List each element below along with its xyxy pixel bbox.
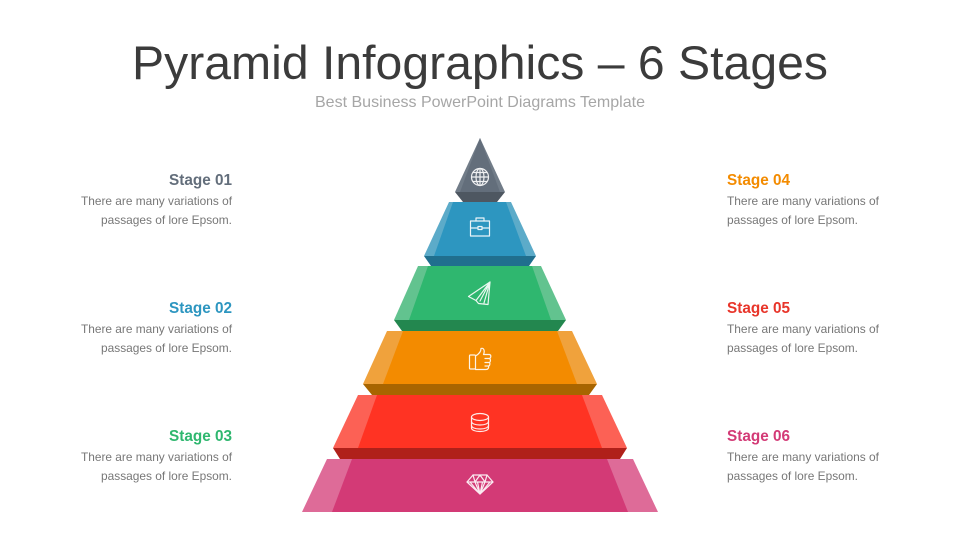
pyramid tier 5: red — [333, 395, 627, 459]
text block: stage 06: There are many variations of — [727, 450, 880, 464]
pyramid tier 4: orange — [363, 331, 597, 395]
text block: stage 04: There are many variations of — [727, 194, 880, 208]
text block: stage 03 — [81, 428, 233, 483]
pyramid tier 3: green — [394, 266, 566, 331]
text block: stage 02 — [81, 300, 233, 355]
text block: stage 05: passages of lore Epsom. — [727, 341, 858, 355]
text block: stage 01: Stage 01 — [169, 172, 232, 189]
text block: stage 01: There are many variations of — [81, 194, 233, 208]
text block: stage 03: There are many variations of — [81, 450, 233, 464]
text block: stage 02: passages of lore Epsom. — [101, 341, 232, 355]
icon: globe — [472, 168, 488, 186]
text block: stage 06: passages of lore Epsom. — [727, 469, 858, 483]
text block: stage 04: passages of lore Epsom. — [727, 213, 858, 227]
text block: stage 02: There are many variations of — [81, 322, 233, 336]
icon: diamond — [467, 475, 493, 494]
text block: stage 01 — [81, 172, 233, 227]
text block: stage 01: passages of lore Epsom. — [101, 213, 232, 227]
pyramid tier 1: slate apex — [455, 138, 505, 202]
text block: stage 04: Stage 04 — [727, 172, 790, 189]
icon: briefcase — [470, 218, 490, 236]
text block: stage 03: Stage 03 — [169, 428, 232, 445]
pyramid tier 2: blue — [424, 202, 536, 266]
text block: stage 05: Stage 05 — [727, 300, 790, 317]
icon: thumbs up — [470, 348, 491, 370]
icon: paper plane — [468, 282, 490, 304]
text block: stage 06 — [727, 428, 880, 483]
text block: stage 02: Stage 02 — [169, 300, 232, 317]
text block: stage 06: Stage 06 — [727, 428, 790, 445]
text block: stage 05 — [727, 300, 880, 355]
subtitle: Best Business PowerPoint Diagrams Template — [315, 94, 645, 111]
text block: stage 05: There are many variations of — [727, 322, 880, 336]
text block: stage 03: passages of lore Epsom. — [101, 469, 232, 483]
pyramid tier 6: pink — [302, 459, 658, 512]
title: Pyramid Infographics – 6 Stages — [132, 36, 828, 89]
pyramid — [302, 138, 658, 512]
text block: stage 04 — [727, 172, 880, 227]
icon: database — [472, 414, 488, 432]
